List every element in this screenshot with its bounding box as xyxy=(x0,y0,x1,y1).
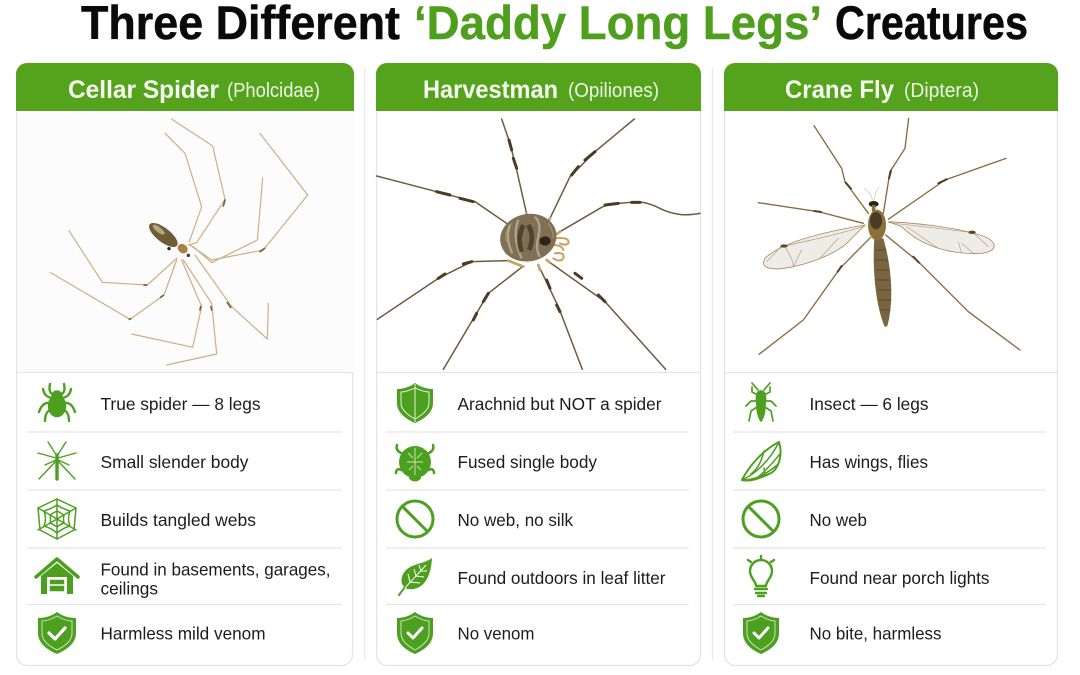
row: no bite: No bite, harmless xyxy=(810,624,942,644)
title xyxy=(81,0,1028,49)
row: porch lights: Found near porch lights xyxy=(810,568,990,588)
row: insect xyxy=(746,383,929,421)
row: slender body: Small slender body xyxy=(100,452,249,472)
icon: prohibited xyxy=(743,501,779,537)
cellar spider header: (Pholcidae) xyxy=(227,80,320,102)
panel: harvestman xyxy=(376,63,701,666)
row: no web xyxy=(743,501,867,537)
row: harmless xyxy=(38,612,266,654)
crane fly header: (Diptera) xyxy=(904,80,979,102)
row: fused body xyxy=(396,445,597,482)
harvestman header: Harvestman xyxy=(423,76,558,104)
row: no web: No web, no silk xyxy=(458,510,573,530)
row: no web xyxy=(397,501,573,537)
harvestman header xyxy=(376,63,701,111)
row: webs xyxy=(38,499,256,539)
row: harmless: Harmless mild venom xyxy=(100,624,266,644)
row: no bite xyxy=(743,612,942,654)
row: no web: No web xyxy=(810,510,867,530)
row: leaf litter xyxy=(399,558,666,595)
row: leaf litter: Found outdoors in leaf litter xyxy=(458,568,666,588)
row: webs: Builds tangled webs xyxy=(100,510,256,530)
cellar spider header: Cellar Spider xyxy=(68,76,219,104)
row: true spider: True spider — 8 legs xyxy=(100,394,261,414)
icon: spider xyxy=(39,384,75,421)
row: arachnid: Arachnid but NOT a spider xyxy=(458,394,662,414)
icon: shield check xyxy=(38,612,76,654)
row: no venom xyxy=(397,612,534,654)
row: basements: Found in basements, garages, xyxy=(100,560,330,580)
row: porch lights xyxy=(748,556,990,596)
crane fly header xyxy=(724,63,1058,111)
row: insect: Insect — 6 legs xyxy=(810,394,929,414)
icon: insect xyxy=(746,383,776,421)
icon: leaf xyxy=(399,558,432,595)
cellar spider header xyxy=(16,63,354,111)
harvestman photo xyxy=(377,119,700,369)
row: basements: ceilings xyxy=(100,578,158,598)
icon: shield check xyxy=(397,612,433,654)
row: no venom: No venom xyxy=(458,624,534,644)
crane fly header: Crane Fly xyxy=(785,76,894,104)
icon: split shield xyxy=(397,383,433,423)
icon: wing xyxy=(742,442,781,481)
row: wings xyxy=(742,442,928,481)
row: basements xyxy=(36,559,330,598)
panel: cellar spider xyxy=(16,63,354,666)
row: fused body: Fused single body xyxy=(458,452,597,472)
icon: round body xyxy=(396,445,434,482)
harvestman header: (Opiliones) xyxy=(568,80,659,102)
row: true spider xyxy=(39,384,261,421)
row: slender body xyxy=(38,442,249,479)
row: wings: Has wings, flies xyxy=(810,452,928,472)
icon: shield check xyxy=(743,612,779,654)
icon: slender spider xyxy=(38,442,76,479)
icon: garage xyxy=(36,559,78,594)
icon: web xyxy=(38,499,76,539)
icon: light bulb xyxy=(748,556,774,596)
cellar spider photo xyxy=(17,111,353,372)
panel: crane fly xyxy=(724,63,1058,666)
crane fly photo xyxy=(758,118,1020,354)
row: arachnid xyxy=(397,383,662,423)
icon: prohibited xyxy=(397,501,433,537)
